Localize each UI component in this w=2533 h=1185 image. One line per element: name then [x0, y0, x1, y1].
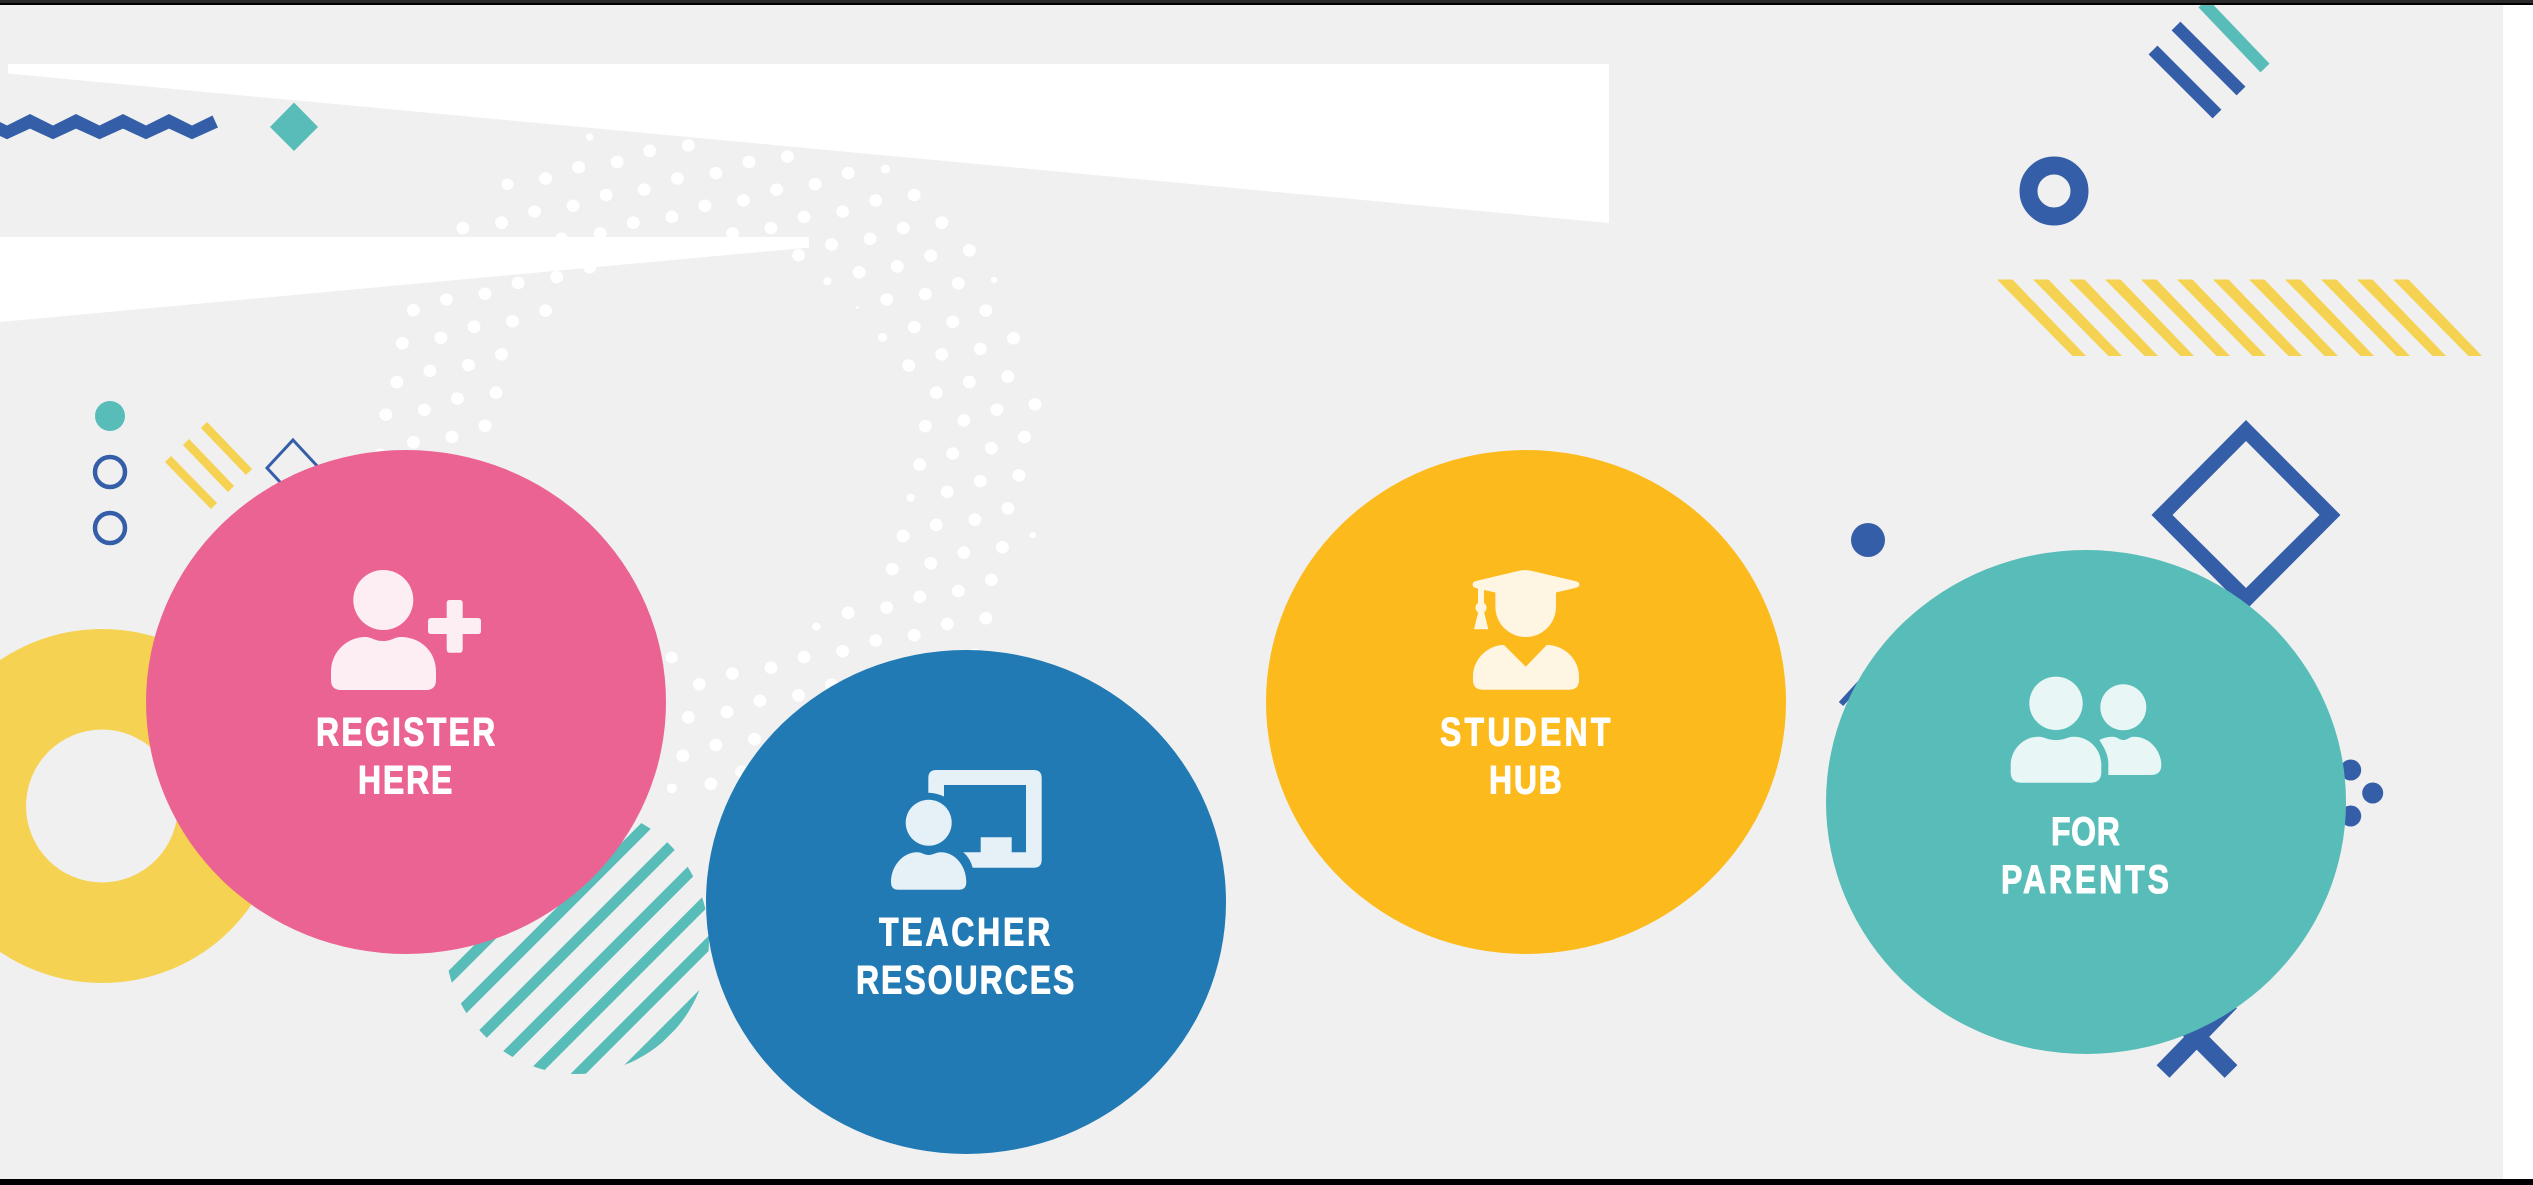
- icon: person plus: [331, 570, 481, 690]
- blue line fragment: [1841, 667, 1875, 704]
- blue cross: [2163, 1002, 2231, 1072]
- blue ring small top: [95, 457, 125, 487]
- label: for parents: FOR: [2051, 809, 2120, 854]
- dotted ring pattern: [374, 133, 1041, 793]
- teal striped circle: [448, 823, 709, 1074]
- label: student hub: [1440, 709, 1610, 802]
- blue ring small bottom: [95, 513, 125, 543]
- white banner lower: [0, 237, 809, 322]
- teal dot: [95, 401, 125, 431]
- blue three dots: [2340, 760, 2383, 826]
- label: register here: [316, 709, 495, 802]
- label: for parents: PARENTS: [2001, 856, 2169, 902]
- label: for parents: [2001, 809, 2169, 902]
- icon: teacher at board: [891, 770, 1042, 890]
- icon: two people: [2011, 677, 2161, 783]
- label: register here: HERE: [358, 757, 452, 802]
- button: for parents: [1826, 550, 2346, 1054]
- top edge bar: [0, 0, 2533, 5]
- teal diamond: [270, 102, 318, 151]
- yellow hatch band: [1997, 280, 2482, 356]
- label: teacher resources: TEACHER: [879, 909, 1050, 954]
- blue outline diamond small: [267, 440, 319, 496]
- bottom edge bar: [0, 1179, 2533, 1185]
- yellow ring: [0, 629, 282, 983]
- zigzag line: [0, 114, 218, 139]
- label: teacher resources: RESOURCES: [856, 957, 1074, 1002]
- blue ring large: [2028, 166, 2080, 216]
- blue dot: [1851, 523, 1885, 557]
- label: student hub: HUB: [1489, 757, 1562, 802]
- button: teacher resources: [706, 650, 1226, 1154]
- yellow triple lines: [168, 425, 249, 506]
- icon: graduate: [1472, 570, 1580, 690]
- top right lines: [2153, 3, 2265, 114]
- label: student hub: STUDENT: [1440, 709, 1610, 754]
- button: register here: [146, 450, 666, 954]
- white banner top: [8, 64, 1609, 223]
- label: register here: REGISTER: [316, 709, 495, 754]
- label: teacher resources: [856, 909, 1074, 1002]
- blue outline diamond large: [2152, 420, 2340, 610]
- button: student hub: [1266, 450, 1786, 954]
